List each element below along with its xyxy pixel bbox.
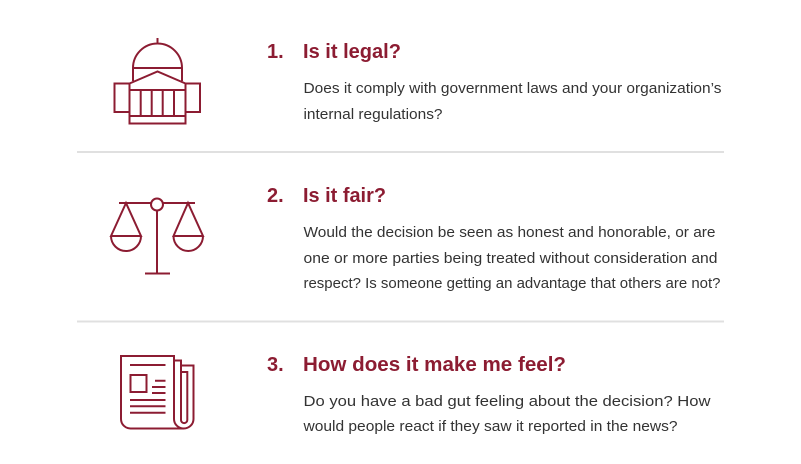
item 1 body text: internal regulations? bbox=[304, 107, 442, 123]
item 3 body text: would people react if they saw it reported in the news? bbox=[302, 419, 678, 435]
icon: government building bbox=[114, 38, 200, 124]
item 2 number: 2. bbox=[267, 185, 284, 207]
item 2 body text: respect? Is someone getting an advantage that others are not? bbox=[304, 276, 720, 292]
item 2 body text: Would the decision be seen as honest and honorable, or are bbox=[304, 225, 716, 241]
item 1 number: 1. bbox=[267, 41, 284, 63]
item 2 body text: one or more parties being treated without consideration and bbox=[304, 251, 718, 267]
item 3 body text bbox=[302, 394, 711, 435]
item 2 heading: Is it fair? bbox=[303, 185, 386, 207]
item 1 heading: Is it legal? bbox=[303, 41, 401, 63]
item 1 body text: Does it comply with government laws and your organization’s bbox=[304, 81, 722, 97]
icon: newspaper bbox=[121, 356, 194, 428]
icon: balance scales bbox=[111, 198, 203, 274]
item 3 number: 3. bbox=[267, 354, 284, 376]
item 1 body text bbox=[304, 81, 722, 123]
item 3 body text: Do you have a bad gut feeling about the decision? How bbox=[304, 394, 711, 410]
item 3 heading: How does it make me feel? bbox=[303, 354, 566, 376]
item 2 body text bbox=[304, 225, 720, 292]
